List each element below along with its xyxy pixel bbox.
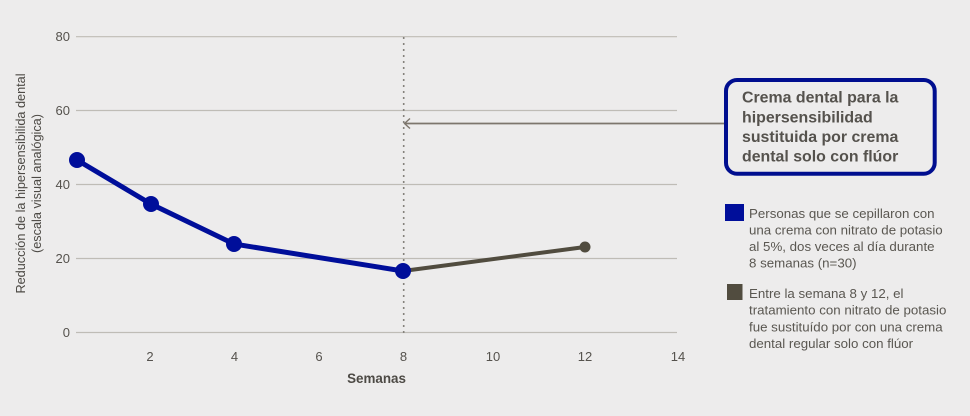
legend: fluoride substitution group <box>727 284 950 351</box>
legend: fluoride substitution group: tratamiento con nitrato de potasio <box>749 302 946 318</box>
x axis tick labels <box>146 349 685 364</box>
legend: potassium nitrate group: 8 semanas (n=30) <box>749 256 857 270</box>
y axis tick labels: 60 <box>56 103 70 118</box>
chart: hypersensitivity reduction over weeks <box>14 29 685 386</box>
legend: fluoride substitution group: Entre la semana 8 y 12, el <box>749 286 904 301</box>
callout: toothpaste substituted: Crema dental para la <box>742 90 898 106</box>
legend: potassium nitrate group: Personas que se cepillaron con <box>749 206 935 221</box>
y axis tick labels: 40 <box>56 177 70 192</box>
y axis title: (escala visual analógica) <box>30 114 44 253</box>
y axis tick labels: 0 <box>63 325 70 340</box>
x axis title: Semanas <box>347 371 406 386</box>
callout: toothpaste substituted: sustituida por crema <box>742 129 898 146</box>
arrow: callout pointing to week 8 <box>404 118 724 128</box>
legend: potassium nitrate group <box>725 204 946 270</box>
legend: fluoride substitution group: fue sustituído por con una crema <box>749 320 943 334</box>
week 8 dotted reference line <box>403 37 405 333</box>
legend: potassium nitrate group: al 5%, dos veces al día durante <box>749 239 935 254</box>
y axis title <box>14 73 44 294</box>
callout: toothpaste substituted: hipersensibilidad <box>742 110 873 126</box>
x axis tick labels: 12 <box>578 349 592 364</box>
legend: fluoride substitution group: dental regular solo con flúor <box>749 336 914 351</box>
x axis tick labels: 6 <box>315 349 323 364</box>
x axis tick labels: 8 <box>400 349 407 364</box>
callout: toothpaste substituted <box>726 80 935 174</box>
legend: potassium nitrate group: una crema con nitrato de potasio <box>749 222 943 238</box>
x axis tick labels: 2 <box>146 349 154 364</box>
y axis title: Reducción de la hipersensibilida dental <box>14 73 28 294</box>
y axis tick labels: 20 <box>56 251 70 266</box>
callout: toothpaste substituted: dental solo con flúor <box>742 148 898 166</box>
x axis tick labels: 14 <box>671 349 685 364</box>
x axis tick labels: 4 <box>231 349 238 364</box>
x axis tick labels: 10 <box>486 349 500 364</box>
y axis tick labels: 80 <box>56 29 70 44</box>
y axis tick labels <box>56 29 70 340</box>
series: fluoride-only toothpaste weeks 8 to 12 <box>403 242 590 271</box>
series: potassium nitrate toothpaste weeks 0 to 8 <box>69 152 411 279</box>
